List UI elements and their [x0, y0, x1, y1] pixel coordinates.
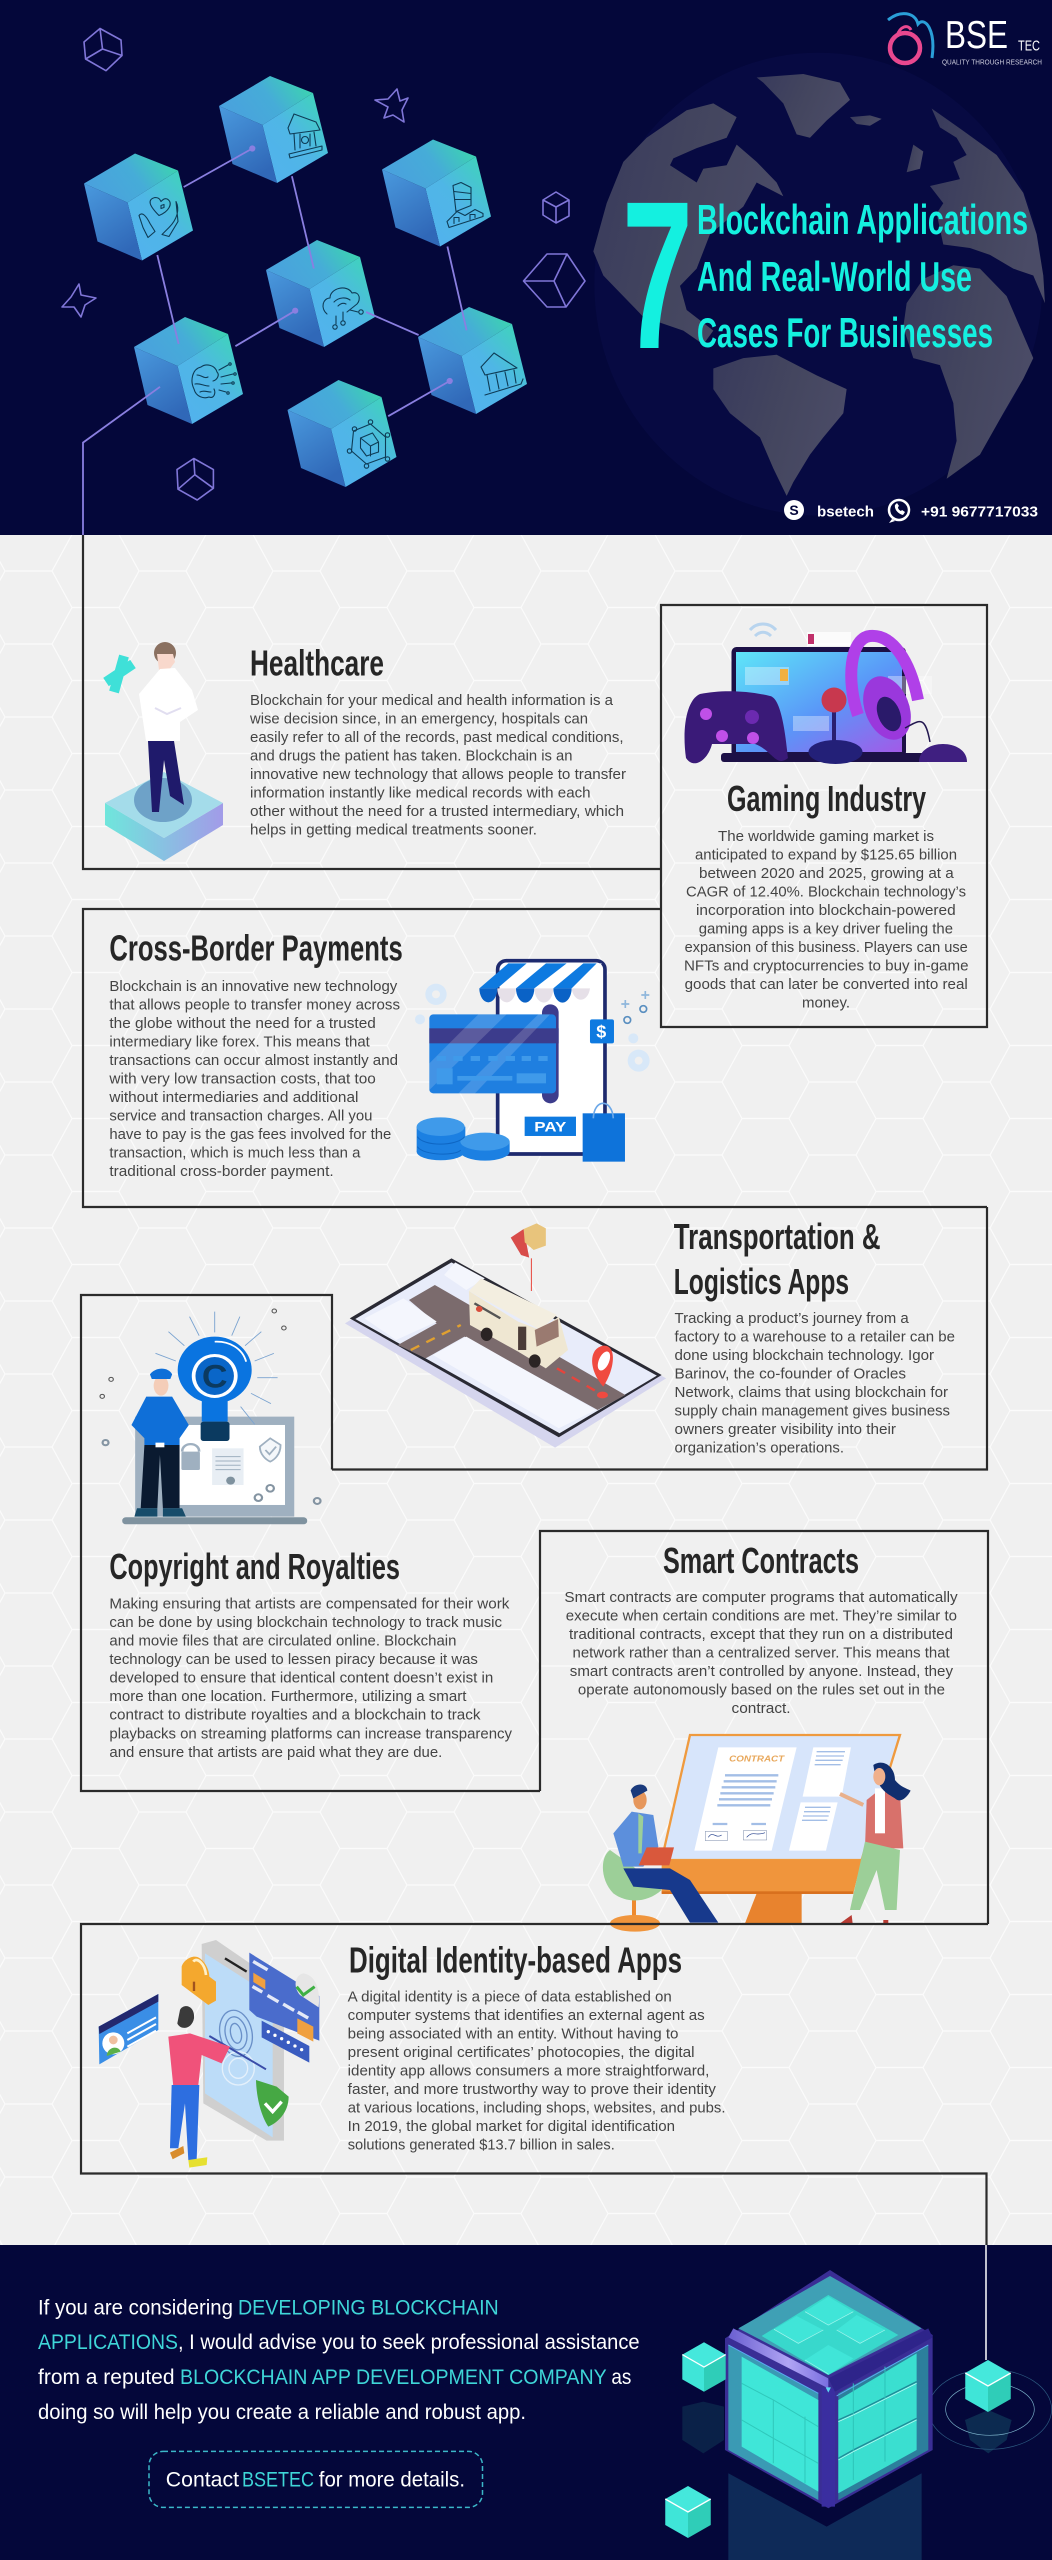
text block: digital identity: In 2019, the global market for digital identification: [348, 2118, 675, 2135]
text block: healthcare: wise decision since, in an emergency, hospitals can: [249, 710, 588, 728]
contact details: [784, 500, 1038, 523]
text block: copyright: developed to ensure that identical content doesn’t exist in: [109, 1670, 493, 1687]
panel: cross-border payments: Cross-Border Payments: [109, 928, 403, 969]
cube: cloud network: [266, 240, 375, 347]
text block: cross-border: transaction, which is much less than a: [109, 1145, 361, 1162]
illustration: copyright officer and bulb: [100, 1309, 321, 1524]
illustration: delivery truck on phone map: [345, 1223, 666, 1448]
text block: digital identity: being associated with an entity. Without having to: [348, 2025, 678, 2042]
text block: cross-border: [108, 978, 400, 1180]
text block: healthcare: innovative new technology that allows people to transfer: [250, 766, 626, 783]
footer message: If you are considering: [38, 2297, 233, 2320]
text block: digital identity: faster, and more trustworthy way to prove their identity: [348, 2081, 717, 2098]
panel: copyright and royalties: Copyright and Royalties: [109, 1546, 400, 1587]
text block: gaming: [684, 828, 968, 1012]
text block: copyright: contract to distribute royalties and a blockchain to track: [109, 1707, 481, 1724]
small floating cube bottom: [665, 2486, 711, 2538]
text block: healthcare: easily refer to all of the records, past medical conditions,: [250, 729, 624, 746]
text block: smart contracts: contract.: [732, 1700, 791, 1717]
text block: gaming: goods that can later be converted into real: [685, 976, 968, 993]
text block: smart contracts: execute when certain conditions are met. They’re similar to: [566, 1608, 957, 1624]
header background: [0, 0, 1052, 535]
illustration: payment shop phone: [415, 961, 650, 1162]
text block: transportation: Network, claims that using blockchain for: [674, 1384, 948, 1401]
text block: cross-border: service and transaction charges. All you: [109, 1108, 373, 1125]
panel: transportation and logistics: [332, 1207, 987, 1470]
text block: copyright: and ensure that artists are paid what they are due.: [109, 1744, 442, 1761]
panel: gaming industry: Gaming Industry: [727, 778, 926, 819]
text block: transportation: owners greater visibility into their: [674, 1421, 896, 1438]
text block: transportation: done using blockchain technology. Igor: [674, 1347, 934, 1364]
text block: transportation: Tracking a product’s journey from a: [674, 1310, 909, 1327]
icon: skype: S: [789, 502, 799, 518]
text block: copyright: [109, 1596, 512, 1761]
contact button: [149, 2451, 482, 2507]
illustration: copyright officer and bulb: C: [202, 1359, 228, 1395]
cube: bank coin: [219, 76, 328, 183]
cube: brain: [134, 317, 243, 424]
text block: copyright: technology can be used to lessen piracy because it was: [109, 1651, 478, 1668]
small hanging cube right: [965, 2360, 1011, 2412]
panel: digital identity apps: [81, 1924, 988, 2245]
footer connector line: [985, 2245, 987, 2360]
text block: smart contracts: smart contracts aren’t controlled by anyone. Instead, they: [570, 1663, 953, 1680]
panel: healthcare: Healthcare: [250, 643, 384, 684]
text block: copyright: playbacks on streaming platforms can increase transparency: [109, 1725, 512, 1742]
text block: gaming: gaming apps is a key driver fueling the: [699, 921, 953, 938]
text block: healthcare: other without the need for a trusted intermediary, which: [250, 803, 624, 820]
contact button: BSETEC: [242, 2468, 314, 2491]
text block: healthcare: helps in getting medical treatments sooner.: [250, 822, 537, 839]
text block: transportation: factory to a warehouse to a retailer can be: [674, 1328, 955, 1346]
text block: cross-border: with very low transaction costs, that too: [108, 1071, 376, 1088]
decorative outline cubes and stars: [62, 28, 585, 500]
footer background: [0, 2245, 1052, 2560]
text block: smart contracts: [564, 1589, 958, 1717]
text block: transportation: supply chain management gives business: [674, 1403, 950, 1420]
text block: transportation: organization’s operations.: [674, 1440, 844, 1457]
text block: digital identity: A digital identity is a piece of data established on: [348, 1988, 672, 2005]
text block: smart contracts: network rather than a centralized server. This means that: [572, 1645, 951, 1662]
contact button: for more details.: [319, 2468, 465, 2491]
text block: copyright: can be done by using blockchain technology to track music: [109, 1614, 503, 1631]
text block: gaming: CAGR of 12.40%. Blockchain technology’s: [686, 884, 966, 901]
text block: copyright: more than one location. Furthermore, utilizing a smart: [109, 1688, 467, 1705]
text block: smart contracts: Smart contracts are computer programs that automatically: [564, 1589, 958, 1606]
cube: logistics box network: [288, 380, 396, 487]
panel: healthcare: [83, 535, 661, 869]
text block: healthcare: and drugs the patient has taken. Blockchain is an: [250, 748, 572, 765]
text block: cross-border: transactions can occur almost instantly and: [109, 1052, 398, 1069]
text block: cross-border: without intermediaries and additional: [108, 1089, 358, 1106]
contact details: bsetech: [817, 504, 874, 520]
text block: digital identity: [348, 1988, 726, 2154]
small floating cube left: [682, 2342, 726, 2392]
text block: cross-border: the globe without the need for a trusted: [109, 1015, 376, 1032]
text block: transportation: [674, 1310, 955, 1457]
illustration: gaming setup: [685, 624, 967, 764]
text block: healthcare: Blockchain for your medical and health information is a: [250, 692, 614, 709]
text block: cross-border: Blockchain is an innovative new technology: [109, 978, 398, 995]
text block: gaming: between 2020 and 2025, growing at a: [699, 865, 954, 882]
text block: cross-border: have to pay is the gas fees involved for the: [109, 1126, 391, 1143]
footer message: DEVELOPING BLOCKCHAIN: [238, 2297, 499, 2320]
panel: gaming industry: [661, 605, 987, 1027]
logo mark: [888, 14, 933, 63]
text block: healthcare: [249, 692, 626, 839]
text block: copyright: and movie files that are circulated online. Blockchain: [109, 1633, 456, 1650]
logo: BSE: [945, 14, 1008, 57]
cube: buildings: [382, 140, 491, 246]
text block: gaming: expansion of this business. Players can use: [685, 939, 968, 956]
text block: digital identity: computer systems that identifies an external agent as: [348, 2007, 705, 2024]
panel: cross-border payments: [83, 909, 987, 1207]
text block: gaming: incorporation into blockchain-powered: [696, 902, 956, 919]
footer message: doing so will help you create a reliable and robust app.: [38, 2401, 526, 2424]
text block: digital identity: at various locations, including shops, websites, and pubs.: [348, 2100, 726, 2116]
panel: smart contracts: Smart Contracts: [663, 1540, 859, 1581]
panel: copyright and royalties: [81, 1295, 540, 1791]
footer message: BLOCKCHAIN APP DEVELOPMENT COMPANY: [180, 2366, 607, 2389]
text block: gaming: anticipated to expand by $125.65 billion: [695, 846, 957, 864]
text block: gaming: money.: [802, 995, 850, 1012]
text block: smart contracts: traditional contracts, except that they run on a distributed: [569, 1626, 953, 1643]
illustration: payment shop phone: PAY: [534, 1118, 567, 1134]
footer message: as: [611, 2366, 631, 2389]
footer message: , I would advise you to seek professional assistance: [178, 2331, 640, 2354]
text block: transportation: Barinov, the co-founder of Oracles: [674, 1366, 906, 1383]
title: [622, 157, 1028, 393]
heading: transportation: Logistics Apps: [674, 1261, 849, 1302]
text block: cross-border: that allows people to transfer money across: [109, 996, 400, 1014]
logo: TEC: [1018, 39, 1040, 55]
text block: copyright: Making ensuring that artists are compensated for their work: [109, 1596, 510, 1613]
footer message: [38, 2297, 640, 2424]
logo: [888, 14, 1042, 66]
panel: smart contracts: [540, 1531, 988, 1932]
contact button: Contact: [166, 2468, 239, 2491]
footer message: from a reputed: [38, 2366, 174, 2389]
illustration: contract board with people: [603, 1735, 911, 1932]
icon: skype: [784, 500, 804, 520]
network connector lines: [83, 146, 467, 535]
cube: healthcare hands: [84, 154, 193, 260]
text block: gaming: NFTs and cryptocurrencies to buy in-game: [684, 958, 968, 975]
logo: QUALITY THROUGH RESEARCH: [942, 59, 1042, 66]
heading: transportation: [674, 1216, 880, 1302]
footer message: APPLICATIONS: [38, 2331, 178, 2354]
illustration: digital identity phone: [99, 1940, 319, 2168]
text block: cross-border: traditional cross-border payment.: [109, 1163, 334, 1180]
title: 7: [622, 157, 693, 393]
heading: transportation: Transportation &: [674, 1216, 880, 1257]
text block: healthcare: information instantly like medical records with each: [250, 785, 591, 802]
text block: digital identity: present original certificates’ photocopies, the digital: [348, 2044, 695, 2061]
text block: smart contracts: operate autonomously based on the rules set out in the: [578, 1682, 945, 1699]
illustration: glowing block cube: [682, 2270, 1052, 2560]
world globe: [593, 53, 1045, 516]
text block: digital identity: identity app allows consumers a more straightforward,: [348, 2062, 709, 2080]
text block: cross-border: intermediary like forex. This means that: [109, 1034, 371, 1051]
cube: columns bank: [418, 307, 527, 414]
text block: gaming: The worldwide gaming market is: [718, 828, 934, 845]
icon: whatsapp: [889, 500, 909, 523]
hexagon page background: [0, 535, 1052, 2245]
illustration: payment shop phone: $: [596, 1021, 606, 1041]
illustration: contract board with people: CONTRACT: [729, 1753, 785, 1763]
contact details: +91 9677717033: [921, 504, 1038, 520]
cube network: [84, 76, 527, 487]
text block: digital identity: solutions generated $13.7 billion in sales.: [348, 2137, 615, 2154]
panel: digital identity apps: Digital Identity-based Apps: [349, 1939, 682, 1980]
illustration: doctor on platform: [105, 642, 223, 861]
